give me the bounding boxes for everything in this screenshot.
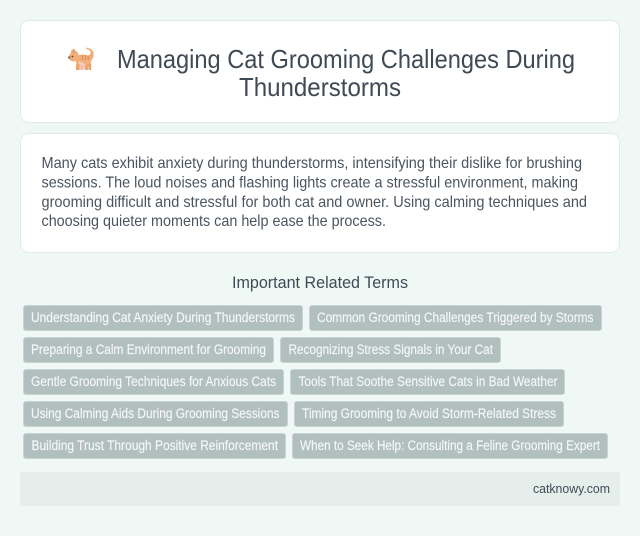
text block: description: Many cats exhibit anxiety during thunderstorms, intensifying their dislike for brushing xyxy=(42,155,582,172)
tag xyxy=(310,306,602,330)
tag xyxy=(24,338,274,362)
title xyxy=(117,44,575,102)
tag: Building Trust Through Positive Reinforcement xyxy=(32,438,278,453)
tag xyxy=(290,370,564,394)
tag: When to Seek Help: Consulting a Feline Grooming Expert xyxy=(300,438,600,453)
tag: Understanding Cat Anxiety During Thunderstorms xyxy=(31,310,295,325)
panel: title card xyxy=(20,20,620,122)
tag xyxy=(24,370,284,394)
text block: description xyxy=(42,155,587,230)
tag: Common Grooming Challenges Triggered by Storms xyxy=(317,310,594,325)
footer bar xyxy=(20,472,620,506)
icon: orange cat xyxy=(68,48,94,70)
footer text: site name: catknowy.com xyxy=(533,481,610,496)
tag: Using Calming Aids During Grooming Sessions xyxy=(31,406,280,421)
tag xyxy=(294,402,564,426)
tag xyxy=(24,434,286,458)
panel: description card xyxy=(20,134,620,252)
tag xyxy=(24,306,302,330)
tag xyxy=(24,402,288,426)
text block: description: sessions. The loud noises and flashing lights create a stressful environment, making xyxy=(42,174,578,192)
tag xyxy=(292,434,608,458)
tag: Recognizing Stress Signals in Your Cat xyxy=(288,342,493,357)
text block: description: choosing quieter moments can help ease the process. xyxy=(42,213,386,230)
tag: Timing Grooming to Avoid Storm-Related Stress xyxy=(302,406,556,421)
tag group: related terms xyxy=(24,306,608,458)
tag: Tools That Soothe Sensitive Cats in Bad Weather xyxy=(298,374,558,389)
tag xyxy=(280,338,500,362)
tag: Gentle Grooming Techniques for Anxious Cats xyxy=(31,374,276,389)
title: Thunderstorms xyxy=(239,72,401,102)
tag: Preparing a Calm Environment for Grooming xyxy=(31,342,266,357)
title: Managing Cat Grooming Challenges During xyxy=(117,44,575,74)
text block: description: grooming difficult and stressful for both cat and owner. Using calming techniques and xyxy=(42,194,587,211)
heading: related terms: Important Related Terms xyxy=(232,274,408,292)
